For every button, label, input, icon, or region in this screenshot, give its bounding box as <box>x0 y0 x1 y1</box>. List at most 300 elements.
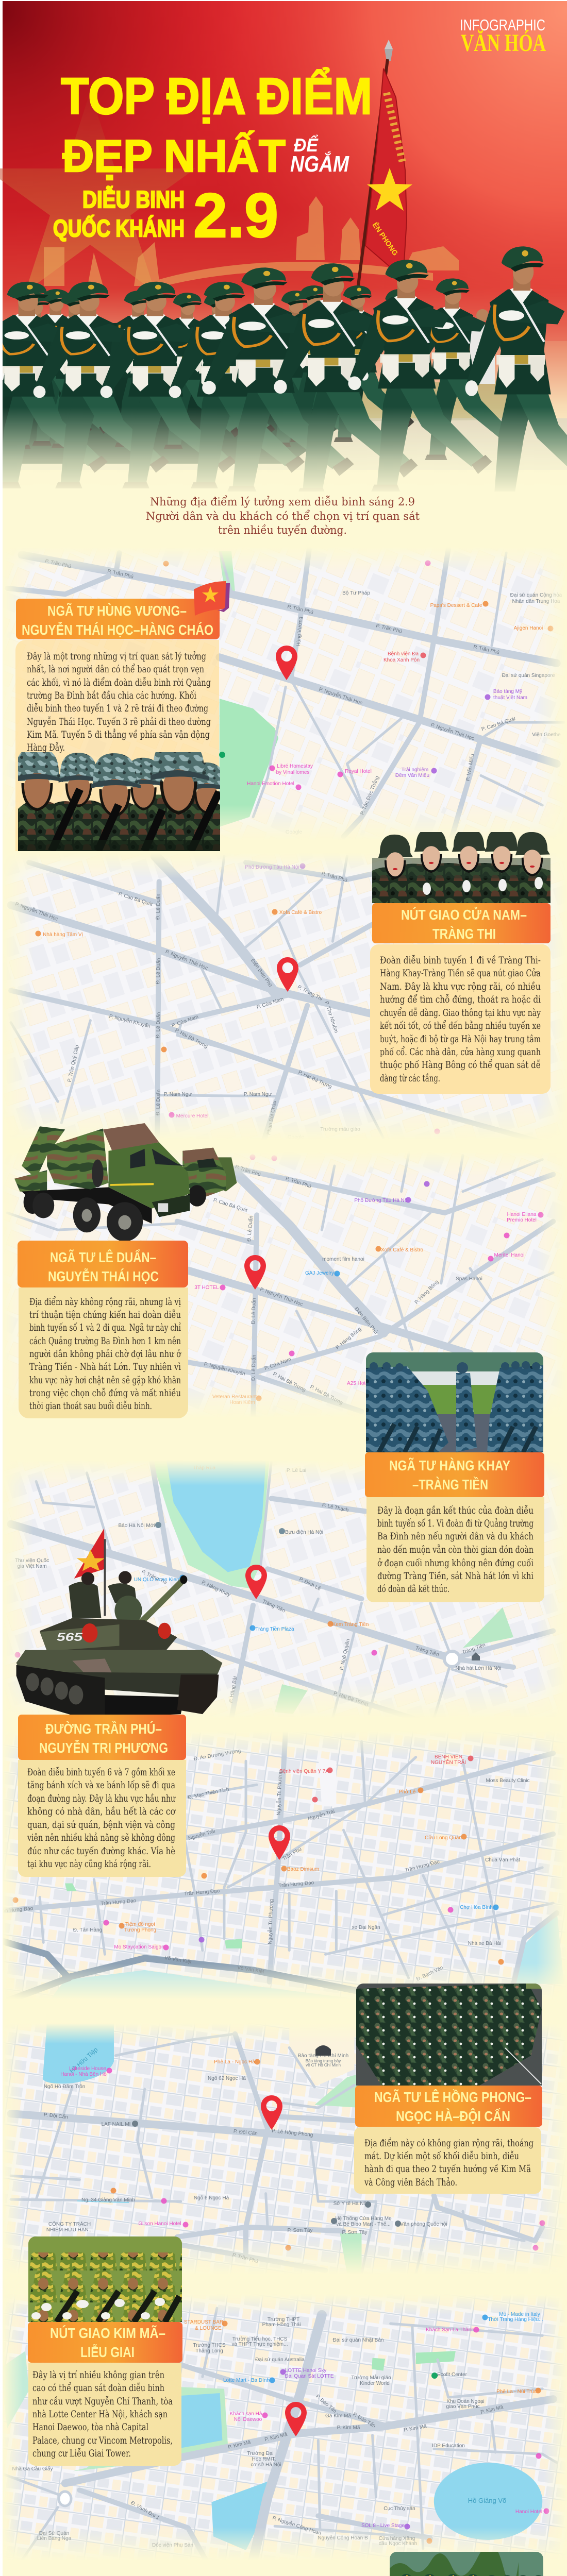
map 1: Hùng Vương: Đại sứ quán Singapore <box>502 673 555 679</box>
body text: khu vực này hơi chật nên sẽ gặp khó khăn <box>29 1375 181 1386</box>
map 3: Lê Duẩn: P. Nguyễn Thái Học <box>259 1286 304 1308</box>
map 7: Kim Mã: Mù - Made in Italy <box>499 2312 540 2317</box>
heading <box>401 906 527 942</box>
body text: trường Ba Đình bắt đầu chia các hướng. Khối <box>27 690 196 701</box>
panel 1: Hùng Vương <box>13 581 230 851</box>
body text <box>377 1505 533 1595</box>
map 4: Hàng Khay: Thư viện Quốc <box>15 1557 49 1564</box>
map 2: Cửa Nam: Nhà hàng Tâm Vị <box>43 932 83 938</box>
body text: nhất, là nơi người dân có thể bao quát trọn vẹn <box>27 664 204 675</box>
map 5: Nguyễn Tri Phương: Chùa Vạn Phật <box>485 1857 520 1863</box>
map 7: Kim Mã: Hồ Giảng Võ <box>468 2497 506 2504</box>
map 3: Lê Duẩn: P. Trần Phú <box>235 1163 261 1178</box>
map 5: Nguyễn Tri Phương: Phở Lê <box>399 1789 416 1795</box>
map 7: Kim Mã: P. Nguyễn Công Hoan <box>272 2514 322 2536</box>
map 3: Lê Duẩn: moment film hanoi <box>322 1257 364 1262</box>
map 5: Nguyễn Tri Phương: Bệnh viện Quân Y 7A <box>279 1769 329 1774</box>
map 4: Hàng Khay: Tháp Rùa <box>193 1465 215 1471</box>
body text: không có nhà dân, hầu hết là các cơ <box>27 1806 176 1817</box>
map 2: Cửa Nam <box>3 853 567 1146</box>
body text: và Công viên Bách Thảo. <box>364 2177 457 2188</box>
panel 7: Kim Mã <box>28 2236 182 2466</box>
map 5: Nguyễn Tri Phương: Võ Văn Kiệt <box>164 1955 192 1965</box>
flag ornament <box>194 581 230 616</box>
map 3: Lê Duẩn: P. Hai Bà Trưng <box>272 1371 307 1393</box>
heading: ĐƯỜNG TRẦN PHÚ– <box>45 1721 162 1737</box>
panel 6: Lê Hồng Phong <box>354 1984 542 2194</box>
city skyline <box>44 196 459 289</box>
heading: NGỌC HÀ–ĐỘI CẤN <box>396 2108 510 2124</box>
body text: viên nên nhiều khả năng sẽ không đông <box>27 1832 175 1843</box>
map 1: Hùng Vương: Viện Goethe <box>532 732 561 738</box>
title: NGẮM <box>290 151 349 177</box>
map 6: Lê Hồng Phong: P. Lê Hồng Phong <box>272 2128 313 2138</box>
body text <box>364 2138 533 2188</box>
map 4: Hàng Khay: Tràng Tiền <box>414 1645 440 1658</box>
body text: Hanoi Daewoo, tòa nhà Capital <box>32 2421 148 2433</box>
heading <box>374 2089 531 2124</box>
body text: nhà Lotte Center Hà Nội, khách sạn <box>32 2409 168 2420</box>
map 4: Hàng Khay: Tràng Tiền <box>461 1641 486 1656</box>
map 7: Kim Mã: Khách sạn Hà <box>230 2411 262 2417</box>
title: DIỄU BINH <box>82 186 185 213</box>
map 1: Hùng Vương: P. Trần Phú <box>44 557 72 570</box>
map 6: Lê Hồng Phong: Bảo tàng trưng bày <box>306 2059 341 2063</box>
map 1: Hùng Vương: P. Tôn Đức Thắng <box>359 775 380 816</box>
map 7: Kim Mã: P. Kim Mã <box>227 2439 252 2450</box>
map 4: Hàng Khay: P. Hàng Khay <box>201 1580 231 1598</box>
map 4: Hàng Khay: Kem Tràng Tiền <box>332 1621 369 1628</box>
map 2: Cửa Nam: Trường mầu giáo <box>320 1126 360 1132</box>
map 7: Kim Mã: Thăng Long <box>195 2348 223 2354</box>
heading bar <box>28 2322 182 2363</box>
map 4: Hàng Khay: P. Hàng Bài <box>228 1676 238 1703</box>
map 6: Lê Hồng Phong: về CT Hồ Chí Minh <box>306 2063 341 2067</box>
map 2: Cửa Nam: Phố Đường Tàu Hà Nội <box>245 864 299 870</box>
map 5: Nguyễn Tri Phương: Trần Hưng Đạo <box>101 1897 137 1907</box>
tank: 565 <box>57 1631 83 1643</box>
map 7: Kim Mã: P. Đào Tấn <box>352 2411 377 2429</box>
map 5: Nguyễn Tri Phương: Nguyễn Tri Phương <box>266 1899 275 1944</box>
map 7: Kim Mã: P. Đào Tấn <box>314 2393 338 2414</box>
map 2: Cửa Nam: P. Hai Bà Trưng <box>174 1027 209 1049</box>
heading: NÚT GIAO KIM MÃ– <box>50 2325 165 2341</box>
map 7: Kim Mã: Ga Kim Mã <box>325 2413 351 2419</box>
map 5: Nguyễn Tri Phương: Nguyễn Tri Phương <box>275 1770 284 1816</box>
map 7: Kim Mã: Trường THCS <box>193 2343 226 2348</box>
map 4: Hàng Khay: UNIQLO Hoan Kiem <box>134 1577 180 1583</box>
map 7: Kim Mã: và THPT Thực nghiệm... <box>232 2342 288 2347</box>
map 7: Kim Mã: Khách Sạn La Thành <box>426 2327 474 2333</box>
map 7: Kim Mã: Đại Sứ Quán <box>39 2531 69 2536</box>
map 5: Nguyễn Tri Phương: Chợ Hòa Bình <box>460 1905 493 1910</box>
map 7: Kim Mã: P. Kim Mã <box>337 2425 360 2431</box>
map 6: Lê Hồng Phong: Lakeside House <box>69 2066 106 2072</box>
map 1: Hùng Vương <box>3 547 567 841</box>
body text: tại khu vực này cũng khá rộng rãi. <box>27 1858 151 1870</box>
map 5: Nguyễn Tri Phương: Moss Beauty Clinic <box>486 1778 530 1784</box>
map 2: Cửa Nam: Mercure Hotel <box>176 1113 208 1119</box>
map 7: Kim Mã: Đ. Vành Đai 1 <box>130 2500 160 2521</box>
pin 1 <box>276 646 297 680</box>
map 7: Kim Mã: Thời Trang Hàng Hiệu... <box>488 2317 543 2323</box>
map 2: Cửa Nam: P. Trần Quý Cáp <box>66 1044 80 1082</box>
title: QUỐC KHÁNH <box>53 215 185 242</box>
body text: đúc như các tuyến đường khác. Vỉa hè <box>27 1845 175 1857</box>
body text: quan, đại sứ quán, bệnh viện và công <box>27 1819 175 1831</box>
map 3: Lê Duẩn: Hanoi Eliana <box>507 1212 537 1217</box>
map 1: Hùng Vương: Khoa Xanh Pôn <box>383 657 420 663</box>
heading bar <box>355 2086 542 2127</box>
map 6: Lê Hồng Phong: P. Đội Cấn <box>233 2128 258 2137</box>
body text: Nguyễn Thái Học. Tuyến 3 rẽ phải đi theo đường <box>27 716 211 727</box>
heading: NGUYỄN THÁI HỌC <box>48 1268 159 1284</box>
map 2: Cửa Nam: Xofa Café & Bistro <box>279 910 322 916</box>
body card <box>354 2127 541 2194</box>
map 1: Hùng Vương: by VinaHomes <box>276 770 309 775</box>
map 3: Lê Duẩn: Xofa Café & Bistro <box>381 1247 424 1253</box>
map 5: Nguyễn Tri Phương: Đ. Mạc Thiên Tích <box>188 1787 229 1801</box>
map 3: Lê Duẩn: 3T HOTEL <box>194 1285 219 1291</box>
map 1: Hùng Vương: P. Trần Phú <box>287 603 314 616</box>
map 5: Nguyễn Tri Phương: Cửu Long Quán <box>425 1835 462 1841</box>
map 3: Lê Duẩn <box>7 1154 560 1413</box>
map 3: Lê Duẩn: Đ. Lê Duẩn <box>246 1215 254 1242</box>
map 1: Hùng Vương: P. Nguyễn Thái Học <box>430 721 475 741</box>
map 7: Kim Mã: Đài Quan Sát LOTTE <box>285 2374 334 2379</box>
map 5: Nguyễn Tri Phương: BỆNH VIỆN <box>435 1753 462 1760</box>
map 4: Hàng Khay: Bưu điện Hà Nội <box>285 1530 323 1535</box>
map 6: Lê Hồng Phong: Văn phòng Quốc hội <box>400 2221 447 2227</box>
panel 8: Liễu Giai <box>389 2545 557 2576</box>
map 7: Kim Mã: Ecofit Center <box>437 2372 468 2378</box>
map 3: Lê Duẩn: Veteran Restaurant <box>212 1394 257 1400</box>
map 6: Lê Hồng Phong <box>3 2022 567 2275</box>
flag: ÊN PHONG <box>371 221 400 257</box>
map 1: Hùng Vương: Ajigen Hanoi <box>514 625 543 631</box>
map 6: Lê Hồng Phong: LAF NAIL MI <box>102 2122 130 2127</box>
map 5: Nguyễn Tri Phương: Trần Hưng Đạo <box>404 1858 441 1874</box>
map 2: Cửa Nam: Google <box>288 1134 305 1140</box>
body card <box>28 2363 181 2466</box>
map 7: Kim Mã: IDP Education <box>432 2443 465 2449</box>
map 1: Hùng Vương: Bệnh viện Đa <box>388 651 419 657</box>
map 1: Hùng Vương: Hanoi Emotion Hotel <box>247 781 294 787</box>
heading: NGUYỄN THÁI HỌC–HÀNG CHÁO <box>22 622 213 638</box>
heading bar <box>16 599 220 639</box>
map 4: Hàng Khay: P. Tràng Thi <box>141 1569 168 1586</box>
pin 7 <box>285 2402 307 2436</box>
heading: –TRÀNG TIỀN <box>412 1477 488 1493</box>
map 3: Lê Duẩn: GAJ Jewelry <box>305 1270 334 1276</box>
map 4: Hàng Khay: Tràng Tiền Plaza <box>255 1626 294 1632</box>
body text <box>27 1767 176 1870</box>
decorative star <box>0 92 195 292</box>
body text: như cầu vượt Nguyễn Chí Thanh, tòa <box>32 2396 173 2407</box>
map 5: Nguyễn Tri Phương: Baoz Dimsum <box>287 1867 319 1872</box>
map 2: Cửa Nam: P. Tràng Thi <box>296 984 323 1002</box>
map 7: Kim Mã: STARDUST BAR <box>184 2319 223 2325</box>
map 2: Cửa Nam: P. Hai Bà Trưng <box>297 1070 332 1090</box>
body text: mát. Dự kiến một số khối diễu binh, diễu <box>364 2150 519 2162</box>
map 3: Lê Duẩn: P. Cao Bá Quát <box>212 1197 248 1214</box>
soldiers marching <box>0 246 567 513</box>
map 3: Lê Duẩn: P. Hai Bà Trưng <box>309 1384 344 1406</box>
map 2: Cửa Nam: P. Nam Ngư <box>244 1092 272 1097</box>
body text: trong việc chọn chỗ đứng và mất nhiều <box>29 1387 181 1399</box>
heading: LIỄU GIAI <box>80 2344 135 2360</box>
map 4: Hàng Khay: gia Việt Nam <box>17 1564 47 1569</box>
map 3: Lê Duẩn: Phố Đường Tàu Hà Nội <box>354 1197 409 1204</box>
body text: Hàng Đẫy. <box>27 742 65 753</box>
map 2: Cửa Nam: P. Thợ Nhuộm <box>323 1001 339 1033</box>
map 1: Hùng Vương: Trải nghiệm <box>402 767 428 773</box>
map 7: Kim Mã: Dốc viện Phụ Sản <box>152 2542 193 2548</box>
map 3: Lê Duẩn: Meritel Hanoi <box>494 1252 524 1258</box>
map 6: Lê Hồng Phong: Sở Y tế Hà Nội <box>333 2200 368 2207</box>
body card <box>366 1497 544 1602</box>
panel 2: Cửa Nam <box>370 828 551 1094</box>
map 7: Kim Mã: Trường Mẫu giáo <box>351 2374 391 2381</box>
map 3: Lê Duẩn: A25 Hotel <box>347 1381 370 1386</box>
map 6: Lê Hồng Phong: và Bé Bibo Mart - Thế... <box>336 2221 391 2227</box>
map 3: Lê Duẩn: Premio Hotel <box>507 1217 537 1223</box>
body text: Đây là vị trí nhiều không gian trên <box>32 2369 164 2381</box>
subtitle: Những địa điểm lý tưởng xem diễu binh sáng 2.9 <box>150 496 415 508</box>
map 2: Cửa Nam: P. Cửa Nam <box>171 1013 199 1029</box>
heading bar <box>372 903 551 943</box>
body text: Tràng Tiền - Nhà hát Lớn. Tuy nhiên vì <box>29 1361 181 1372</box>
map 5: Nguyễn Tri Phương: Đ. Bạch Vân <box>415 1965 444 1982</box>
map 7: Kim Mã: Lotte Mart - Ba Đình <box>223 2378 270 2383</box>
map 2: Cửa Nam: P. Cửa Nam <box>256 996 285 1010</box>
map 2: Cửa Nam: P. Cao Bá Quát <box>118 891 153 908</box>
map 1: Hùng Vương: P. Nguyễn Thái Học <box>318 686 363 706</box>
map 2: Cửa Nam: Đ. Lê Duẩn <box>155 1089 162 1115</box>
map 7: Kim Mã: cơ sở Hà Nội <box>251 2462 281 2468</box>
body text: các khối, vì nó là điểm đoàn diễu binh rời Quảng <box>27 677 211 688</box>
pin 6 <box>261 2095 282 2130</box>
map 2: Cửa Nam: P. Nam Ngư <box>164 1092 192 1097</box>
map 5: Nguyễn Tri Phương: Nguyễn Trãi <box>187 1827 216 1841</box>
map 7: Kim Mã: dầu Ngọc Khánh <box>379 2540 417 2547</box>
map 7: Kim Mã: Phê La - Núi Trúc <box>496 2389 537 2395</box>
map 1: Hùng Vương: Đại sứ quán Cộng hòa <box>510 592 562 598</box>
heading <box>389 1458 510 1493</box>
map 5: Nguyễn Tri Phương: Trần Phú <box>281 1846 303 1862</box>
map 2: Cửa Nam: Đ. Lê Duẩn <box>155 958 162 984</box>
truck <box>14 1123 237 1242</box>
heading <box>50 2325 165 2360</box>
map 1: Hùng Vương: Kho bạc Nhà <box>135 758 164 764</box>
map 5: Nguyễn Tri Phương: Mo Staycation Saigon <box>114 1944 164 1950</box>
map 5: Nguyễn Tri Phương: Nguyễn Trãi <box>307 1808 336 1822</box>
map 1: Hùng Vương: thuật Việt Nam <box>493 695 527 701</box>
body text <box>29 1296 181 1412</box>
map 4: Hàng Khay: P. Ngô Quyền <box>339 1638 351 1671</box>
map 6: Lê Hồng Phong: Hồ Hữu Tiệp <box>68 2046 99 2075</box>
title <box>53 67 372 250</box>
photo soldiers from above <box>356 1984 542 2086</box>
map 1: Hùng Vương: Bộ Tư Pháp <box>342 590 370 596</box>
map 3: Lê Duẩn: P. Hàng Bông <box>335 1326 362 1351</box>
map 2: Cửa Nam: Phan Bội Châu <box>266 1100 278 1136</box>
map 7: Kim Mã: Liên Bang Nga <box>37 2536 72 2541</box>
hero header <box>0 1 567 513</box>
photo women soldiers <box>372 828 551 903</box>
body text: trí thuận tiện chứng kiến hai đoàn diễu <box>29 1309 181 1320</box>
map 6: Lê Hồng Phong: NHIỆM HỮU HẠN... <box>46 2226 93 2233</box>
logo <box>460 16 546 57</box>
heading: NGÃ TƯ LÊ HỒNG PHONG– <box>374 2089 531 2105</box>
panel 4: Hàng Khay <box>365 1352 544 1602</box>
map 1: Hùng Vương: Bảo tàng Mỹ <box>493 689 522 694</box>
body text: tăng bánh xích và xe bánh lốp sẽ đi qua <box>27 1780 175 1791</box>
map 7: Kim Mã: Trường Tiểu học, THCS <box>232 2336 288 2342</box>
map 1: Hùng Vương: P. Cao Bá Quát <box>481 716 516 732</box>
map 2: Cửa Nam: P. Nguyễn Thái Học <box>164 948 209 971</box>
body text: dàng từ các tầng. <box>380 1073 440 1084</box>
map 5: Nguyễn Tri Phương: Võ Văn Kiệt <box>237 1965 265 1975</box>
map 5: Nguyễn Tri Phương: Trần Hưng Đạo <box>278 1879 314 1889</box>
map 3: Lê Duẩn: P. Trần Phú <box>285 1175 312 1190</box>
ground <box>216 381 518 422</box>
map 6: Lê Hồng Phong: Ng. 34 Giảng Văn Minh <box>81 2197 135 2203</box>
title: TOP ĐỊA ĐIỂM <box>61 67 372 125</box>
subtitle <box>146 496 420 536</box>
map 2: Cửa Nam: Đ. Lê Duẩn <box>155 1012 162 1038</box>
panel 3: Lê Duẩn <box>14 1123 237 1418</box>
body card <box>370 944 551 1094</box>
pin 4 <box>245 1565 267 1599</box>
body text: diễu binh theo tuyến 1 và 2 rẽ trái đi theo đường <box>27 703 208 714</box>
map 4: Hàng Khay: Tràng Tiền <box>261 1598 286 1614</box>
map 5: Nguyễn Tri Phương: Tiệm đồ ngọt <box>125 1921 155 1927</box>
map 4: Hàng Khay: Báo Hà Nội Mới <box>118 1523 155 1529</box>
map 6: Lê Hồng Phong: Ngõ Hồ Đầm Trôn <box>44 2083 85 2090</box>
heading <box>39 1721 168 1756</box>
body card <box>15 640 219 851</box>
body text: cách Quảng trường Ba Đình hơn 1 km nên <box>29 1335 181 1347</box>
map 3: Lê Duẩn: Điện Biên Phủ <box>353 1306 379 1335</box>
map 1: Hùng Vương: Libré Homestay <box>277 764 313 769</box>
map 2: Cửa Nam: P. Trần Phú <box>321 871 348 884</box>
heading <box>22 603 213 638</box>
body text: Palace, chung cư Vincom Metropolis, <box>32 2435 173 2446</box>
map 7: Kim Mã: Cục Thủy sản <box>383 2505 415 2512</box>
body card <box>18 1760 186 1877</box>
map 7: Kim Mã: Nguyễn Công Hoan B <box>318 2534 368 2541</box>
heading: NÚT GIAO CỬA NAM– <box>401 906 527 923</box>
body text <box>380 955 541 1084</box>
body text: Địa điểm này không rộng rãi, nhưng là vị <box>29 1296 181 1308</box>
photo soldiers <box>18 752 220 851</box>
title: ĐẸP NHẤT <box>62 130 286 181</box>
subtitle: Người dân và du khách có thể chọn vị trí quan sát <box>146 510 420 522</box>
heading bar <box>18 1715 186 1760</box>
map 7: Kim Mã: Học RMIT, <box>252 2456 276 2462</box>
map 3: Lê Duẩn: P. Cửa Nam <box>263 1356 292 1371</box>
flag <box>349 40 412 357</box>
map 7: Kim Mã: Trường Đại <box>247 2451 274 2456</box>
map 5: Nguyễn Tri Phương: xe Đại Ngân <box>352 1925 380 1930</box>
map 7: Kim Mã: Đại sứ quán Australia <box>255 2357 305 2363</box>
map 3: Lê Duẩn: Đ. Lê Duẩn <box>250 1298 257 1324</box>
map 6: Lê Hồng Phong: Ngõ 62 Ngọc Hà <box>208 2076 246 2081</box>
map 2: Cửa Nam: Đ. Lê Duẩn <box>155 893 162 920</box>
map 1: Hùng Vương: Hùng Vương <box>296 617 304 647</box>
map 3: Lê Duẩn: P. Hàng Bông <box>414 1279 440 1306</box>
pin 5 <box>269 1825 290 1860</box>
map 7: Kim Mã: Kinder World <box>360 2381 390 2386</box>
map 7: Kim Mã: SOL 8 - Live Stage <box>361 2523 405 2529</box>
body text: chung cư Liễu Giai Tower. <box>32 2448 131 2459</box>
map 7: Kim Mã: Cửa hàng Xăng <box>379 2535 415 2541</box>
map 6: Lê Hồng Phong: Bảo tàng Hồ Chí Minh <box>298 2053 348 2059</box>
body text: cao có thể quan sát đoàn diễu binh <box>32 2382 164 2394</box>
body text: Đoàn diễu binh tuyến 6 và 7 gồm khối xe <box>27 1767 175 1778</box>
heading: NGÃ TƯ LÊ DUẨN– <box>50 1249 156 1265</box>
map 6: Lê Hồng Phong: Hệ Thống Cửa Hàng Mẹ <box>335 2215 392 2222</box>
subtitle: trên nhiều tuyến đường. <box>218 524 347 536</box>
map 7: Kim Mã: Hanoi Hotel <box>515 2509 542 2515</box>
map 5: Nguyễn Tri Phương: Nhà xe Bá Hải <box>468 1941 501 1946</box>
map 7: Kim Mã: LOTTE Hanoi Sky <box>285 2368 326 2374</box>
map 6: Lê Hồng Phong: P. Sơn Tây <box>288 2228 312 2233</box>
map 1: Hùng Vương: Papa's Dessert & Cafe <box>430 603 482 608</box>
map 5: Nguyễn Tri Phương <box>4 1735 563 1997</box>
heading: NGUYỄN TRI PHƯƠNG <box>39 1740 168 1756</box>
body text: Kim Mã. Tuyến 5 đi thẳng về phía sân vận động <box>27 728 210 740</box>
map 1: Hùng Vương: P. Trần Phú <box>375 622 403 635</box>
map 7: Kim Mã: Khu Đoàn Ngoại <box>446 2399 485 2404</box>
map 2: Cửa Nam: P. Nguyễn Thái Học <box>14 901 59 922</box>
photo air force soldiers <box>366 1352 543 1452</box>
map 1: Hùng Vương: P. Trần Phú <box>473 643 500 656</box>
map 1: Hùng Vương: P. Trần Phú <box>107 568 134 580</box>
map 4: Hàng Khay: P. Đinh Lễ <box>298 1575 322 1592</box>
map 6: Lê Hồng Phong: P. Trần Phú <box>231 2252 259 2265</box>
body text: thời gian thoát sau buổi diễu binh. <box>29 1400 152 1412</box>
map 4: Hàng Khay <box>3 1460 567 1725</box>
map 5: Nguyễn Tri Phương: Trần Hưng Đạo <box>184 1888 220 1897</box>
body text: đó đoàn đã kết thúc. <box>377 1583 449 1595</box>
heading bar <box>18 1241 188 1287</box>
map 4: Hàng Khay: P. Lê Lai <box>287 1468 306 1473</box>
heading: NGÃ TƯ HÙNG VƯƠNG– <box>47 603 187 619</box>
body card <box>19 1287 188 1418</box>
map 7: Kim Mã: P. Kim Mã <box>480 2404 504 2415</box>
title: 2.9 <box>193 180 278 250</box>
heading <box>48 1249 159 1284</box>
map 5: Nguyễn Tri Phương: Tương Phong <box>124 1927 156 1933</box>
photo green soldiers <box>390 2545 557 2576</box>
map 5: Nguyễn Tri Phương: NGUYỄN TRÃI <box>431 1759 466 1766</box>
map 7: Kim Mã: P. Kim Mã <box>404 2424 427 2433</box>
map 6: Lê Hồng Phong: CÔNG TY TRÁCH <box>48 2221 91 2227</box>
map 4: Hàng Khay: P. Hai Bà Trưng <box>333 1691 369 1707</box>
map 1: Hùng Vương: Đêm Văn Miếu <box>395 772 429 778</box>
map 3: Lê Duẩn: Đ. Lê Duẩn <box>250 1354 257 1381</box>
heading: NGÃ TƯ HÀNG KHAY <box>389 1458 510 1473</box>
body text <box>32 2369 173 2459</box>
map 7: Kim Mã: P. Kim Mã <box>264 2432 288 2443</box>
map 6: Lê Hồng Phong: Ngõ 6 Ngọc Hà <box>194 2195 229 2201</box>
map 1: Hùng Vương: P. Văn Miếu <box>465 753 476 782</box>
map 6: Lê Hồng Phong: P. Đội Cấn <box>43 2112 68 2120</box>
heading bar <box>365 1452 544 1497</box>
map 7: Kim Mã: & LOUNGE <box>195 2326 222 2331</box>
